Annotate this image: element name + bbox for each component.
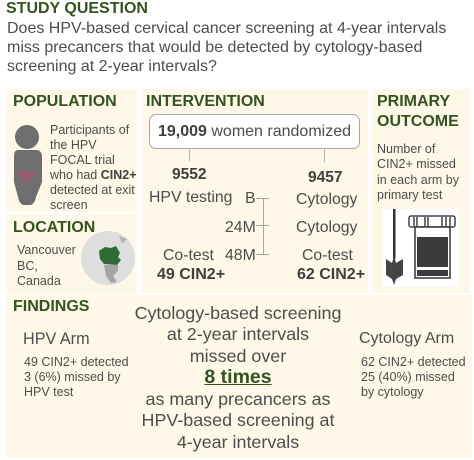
panel: population xyxy=(7,89,136,212)
text: population description: detected at exit xyxy=(50,182,135,196)
block: main finding: as many precancers as xyxy=(146,389,330,409)
text: population description: FOCAL trial xyxy=(50,152,115,166)
heading: findings: FINDINGS xyxy=(13,298,89,315)
heading: study question: STUDY QUESTION xyxy=(6,0,148,17)
icon: person with uterus xyxy=(14,125,42,205)
text: study question: screening at 2-year intervals? xyxy=(7,58,217,75)
text: location: Vancouver xyxy=(17,243,76,257)
heading: location: LOCATION xyxy=(13,219,95,236)
result: cytology arm: 62 CIN2+ xyxy=(297,266,365,283)
block: main finding: 8 times xyxy=(204,366,272,388)
text: location: Canada xyxy=(17,274,61,288)
icon: brush and sample vial xyxy=(383,209,459,287)
text: population description: Participants of xyxy=(50,122,129,136)
block: main finding xyxy=(135,302,341,452)
label: HPV co-test: Co-test xyxy=(163,247,214,264)
connector: right arm xyxy=(324,148,325,162)
label: 24 months: 24M xyxy=(225,219,256,236)
heading: primary outcome xyxy=(377,93,459,130)
text: study question xyxy=(7,20,446,75)
block: HPV arm findings xyxy=(23,330,129,399)
block: main finding: 4-year intervals xyxy=(177,432,299,452)
text: cytology arm results: 25 (40%) missed xyxy=(361,370,455,384)
text: cytology arm results: by cytology xyxy=(361,385,424,399)
heading: primary outcome: PRIMARY xyxy=(377,93,450,110)
text: outcome description: CIN2+ missed xyxy=(377,157,456,171)
number: cytology arm: 9457 xyxy=(308,169,342,186)
text: location xyxy=(17,243,76,288)
text: cytology arm results: 62 CIN2+ detected xyxy=(361,355,466,369)
label: cytology baseline: Cytology xyxy=(296,191,357,208)
heading: population: POPULATION xyxy=(13,93,117,110)
text: study question: Does HPV-based cervical cancer screening at 4-year intervals xyxy=(7,20,446,37)
text: population description xyxy=(50,122,137,212)
callout: women randomized: 19,009 women randomized xyxy=(158,123,351,140)
label: cytology 24 months: Cytology xyxy=(296,219,357,236)
label: cytology arm: Cytology Arm xyxy=(359,330,454,347)
label: HPV arm: HPV Arm xyxy=(23,330,90,348)
heading: primary outcome: OUTCOME xyxy=(377,112,459,130)
label: cytology co-test: Co-test xyxy=(302,247,353,264)
text: study question: miss precancers that would be detected by cytology-based xyxy=(7,39,422,56)
text: outcome description: primary test xyxy=(377,188,442,202)
text: outcome description xyxy=(377,142,459,202)
panel: intervention xyxy=(142,89,368,293)
block: cytology arm findings xyxy=(359,330,466,399)
text: HPV arm results: HPV test xyxy=(24,385,73,399)
connector: left arm xyxy=(189,148,190,161)
text: population description: the HPV xyxy=(50,138,97,152)
text: outcome description: Number of xyxy=(377,142,435,156)
block: main finding: missed over xyxy=(190,346,286,366)
icon: globe with Canada xyxy=(81,231,135,285)
panel: location xyxy=(7,214,136,294)
callout: women randomized xyxy=(149,114,360,149)
timeline bracket xyxy=(256,198,269,255)
text: cytology arm results xyxy=(361,355,466,399)
text: HPV arm results: 49 CIN2+ detected xyxy=(24,355,129,369)
label: 48 months: 48M xyxy=(225,247,256,264)
panel: primary outcome xyxy=(372,89,470,293)
text: location: BC, xyxy=(17,259,38,273)
result: HPV arm: 49 CIN2+ xyxy=(157,266,225,283)
block: main finding: Cytology-based screening xyxy=(135,302,341,322)
block: main finding: at 2-year intervals xyxy=(167,324,309,344)
number: HPV arm: 9552 xyxy=(172,166,206,183)
text: HPV arm results xyxy=(24,355,129,399)
label: baseline: B xyxy=(245,190,256,207)
block: main finding: HPV-based screening at xyxy=(142,410,334,430)
text: HPV arm results: 3 (6%) missed by xyxy=(24,370,121,384)
text: outcome description: in each arm by xyxy=(377,173,459,187)
panel: findings xyxy=(7,295,472,458)
text: population description: who had CIN2+ xyxy=(50,168,137,182)
text: population description: screen xyxy=(50,198,88,212)
label: HPV testing: HPV testing xyxy=(149,189,232,206)
heading: intervention: INTERVENTION xyxy=(146,93,265,110)
